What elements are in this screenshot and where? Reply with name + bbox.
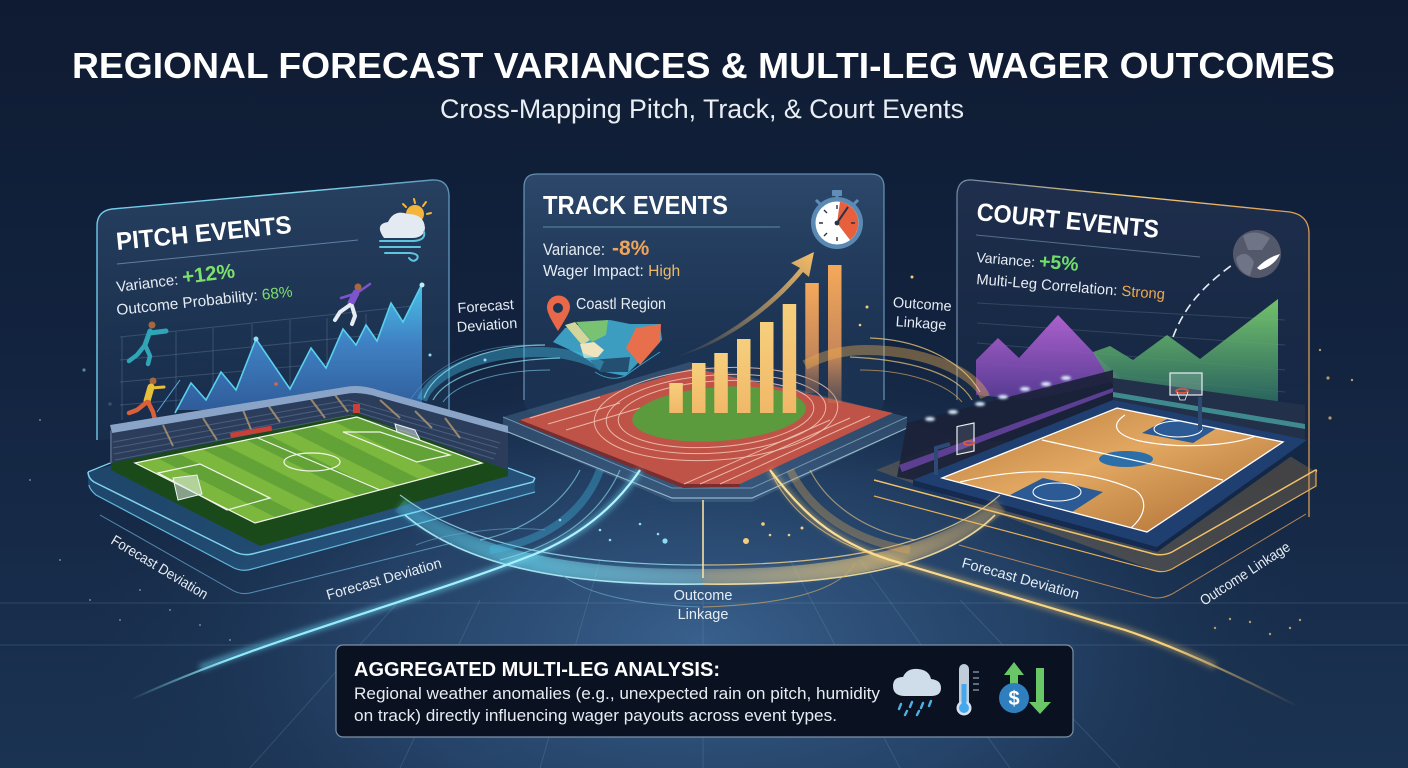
track infield — [630, 381, 808, 447]
hoop far — [1170, 373, 1202, 430]
track surface — [520, 368, 893, 484]
pitch probability stat: Outcome Probability: 68% — [116, 284, 294, 319]
flow line: gold highlight — [770, 470, 1295, 705]
flow arcs: outcome linkage — [703, 338, 1215, 666]
label: outcome linkage bottom centre — [674, 588, 732, 623]
panel: pitch events — [97, 180, 449, 440]
icon: thermometer — [956, 664, 979, 716]
label: outcome linkage bottom centre: Outcome — [674, 588, 732, 604]
panel: court events — [957, 180, 1309, 517]
callout body — [354, 684, 880, 725]
lane lines — [530, 360, 870, 484]
flow arcs: forecast deviation — [200, 345, 703, 668]
court stands left — [897, 370, 1113, 480]
wager impact stat: Wager Impact: High — [543, 263, 680, 280]
label: outcome linkage middle: Outcome — [892, 295, 952, 315]
area chart: pitch variance — [157, 282, 424, 413]
goal near — [173, 475, 202, 500]
stadium roof rim — [110, 386, 508, 433]
flow line: blue highlight — [130, 470, 640, 700]
bar chart: rising wagers — [669, 265, 842, 413]
paint far — [1142, 419, 1217, 443]
track variance value: -8% — [612, 237, 650, 260]
track model — [520, 360, 893, 488]
heading: court events: COURT EVENTS — [975, 198, 1160, 244]
map region label: Coastl Region — [576, 296, 666, 313]
particle dots — [428, 276, 914, 544]
pitch surface — [135, 417, 482, 523]
vertical connector — [700, 500, 706, 578]
label: forecast deviation middle: Forecast — [457, 297, 514, 317]
pitch variance stat: Variance: +12% — [115, 260, 236, 297]
panel: track events — [524, 174, 884, 414]
callout body: Regional weather anomalies (e.g., unexpected rain on pitch, humidity — [354, 684, 880, 703]
stadium pitch model — [110, 386, 508, 546]
goal far — [395, 424, 420, 440]
callout heading: AGGREGATED MULTI-LEG ANALYSIS: — [354, 659, 720, 681]
court stands back — [1113, 378, 1305, 440]
area chart: purple — [976, 315, 1122, 400]
icon: runner cyan — [129, 322, 166, 364]
icon: payout arrows — [999, 662, 1051, 714]
stadium base — [111, 413, 508, 546]
platform: pitch — [88, 440, 535, 594]
heading: track events: TRACK EVENTS — [543, 190, 728, 220]
platform: track — [503, 362, 907, 502]
callout: aggregated multi-leg analysis — [336, 645, 1073, 737]
heading: pitch events: PITCH EVENTS — [115, 211, 293, 256]
line chart grid — [120, 305, 422, 420]
label: outcome linkage bottom centre: Linkage — [678, 607, 728, 623]
icon: location pin — [547, 296, 570, 331]
court variance stat: Variance: +5% — [976, 245, 1079, 276]
label: forecast deviation middle — [455, 297, 518, 336]
icon: rain cloud — [893, 669, 941, 715]
icon: runner red and yellow — [129, 378, 164, 420]
stadium stands — [110, 392, 508, 470]
area chart: green — [1093, 299, 1278, 405]
label: outcome linkage middle: Linkage — [895, 314, 947, 334]
label: forecast deviation left: Forecast Deviation — [108, 533, 210, 603]
icon: region map with pin — [547, 296, 662, 378]
icon: weather cloud sun and wind — [380, 199, 431, 261]
icon: ball with dashed trajectory — [1173, 230, 1281, 337]
paint near — [1010, 478, 1103, 512]
icon: payout arrows: $ — [1008, 688, 1020, 710]
callout body: on track) directly influencing wager payouts across event types. — [354, 706, 837, 725]
label: forecast deviation lower: Forecast Deviation — [325, 556, 443, 604]
center circle — [1099, 451, 1153, 467]
court base — [913, 400, 1307, 547]
label: forecast deviation middle: Deviation — [456, 316, 518, 336]
rising arrow — [672, 252, 814, 358]
label: forecast deviation right: Forecast Deviation — [960, 555, 1081, 603]
icon: stopwatch — [811, 190, 863, 249]
subtitle: Cross-Mapping Pitch, Track, & Court Events — [440, 94, 964, 124]
label: outcome linkage right: Outcome Linkage — [1197, 539, 1293, 609]
multi-leg correlation stat: Multi-Leg Correlation: Strong — [976, 272, 1166, 303]
title: REGIONAL FORECAST VARIANCES & MULTI-LEG WAGER OUTCOMES — [72, 45, 1335, 86]
hoop near — [936, 423, 974, 475]
label: outcome linkage middle — [891, 295, 952, 334]
wooden floor — [942, 408, 1283, 532]
icon: runner purple — [335, 284, 370, 324]
basketball court model — [897, 370, 1307, 552]
chart grid — [977, 303, 1285, 392]
platform: court — [874, 440, 1316, 598]
track variance stat: Variance: — [543, 241, 605, 259]
